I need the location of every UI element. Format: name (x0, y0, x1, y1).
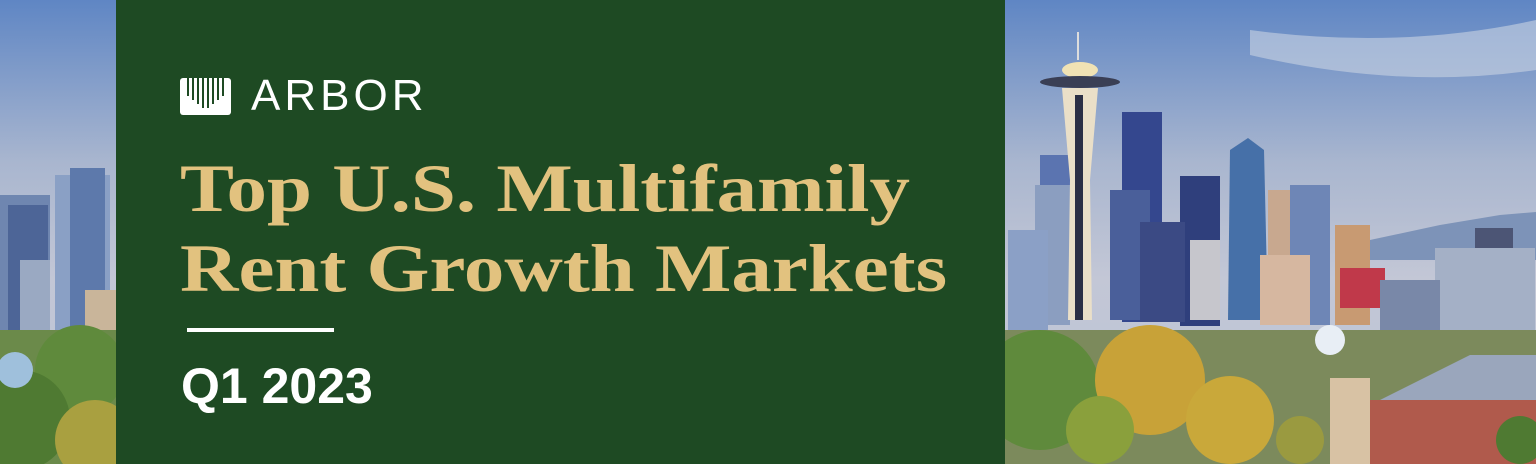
panel: green title panel (116, 0, 1005, 464)
text: ARBOR: ARBOR (251, 71, 427, 120)
logo: Arbor (180, 71, 427, 120)
icon: arbor logo mark (180, 78, 231, 115)
title: Top U.S. Multifamily (180, 150, 910, 226)
title (180, 150, 947, 306)
title: Rent Growth Markets (180, 230, 947, 306)
subtitle: Q1 2023: Q1 2023 (181, 358, 373, 414)
